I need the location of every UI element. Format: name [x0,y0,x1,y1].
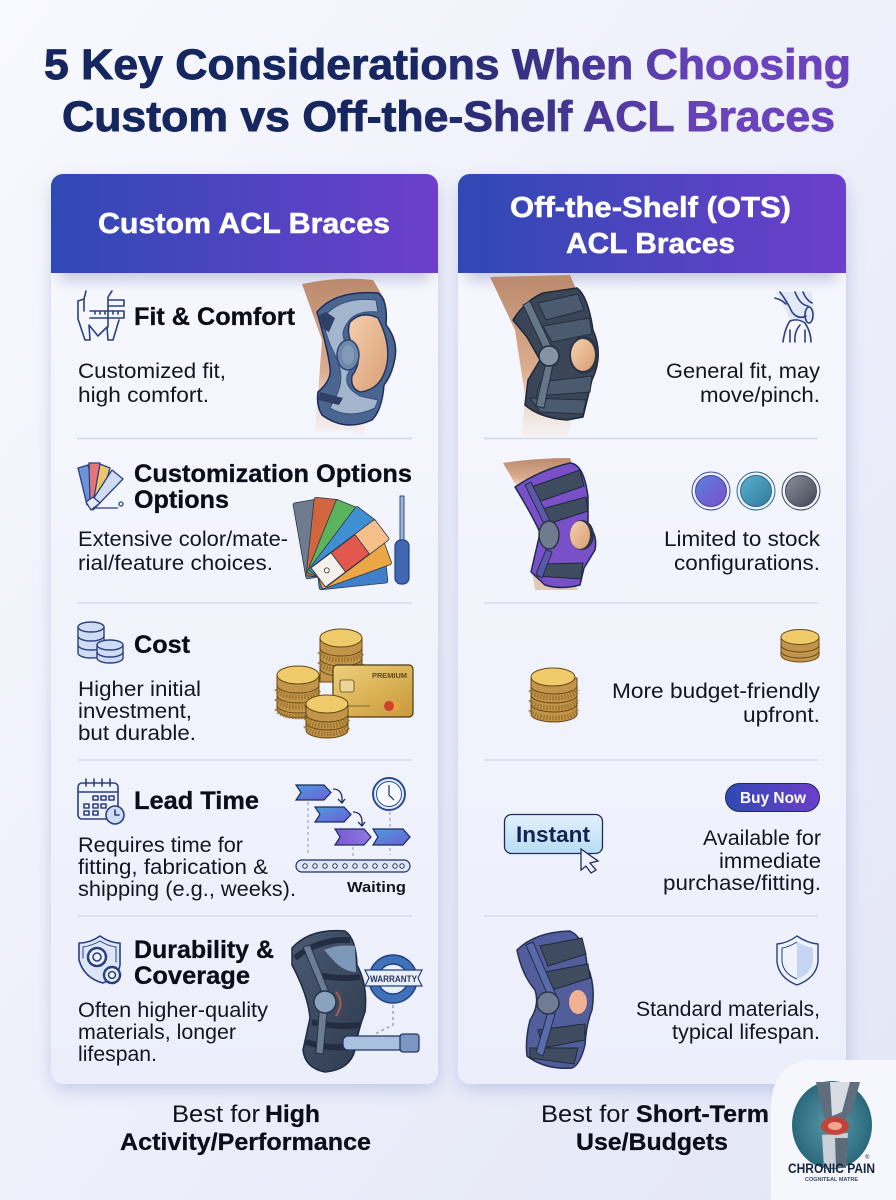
row: durability and coverage [78,931,422,1072]
row: immediate purchase: immediate [719,850,821,873]
row: cost: investment, [78,700,192,723]
row: standard materials [517,931,820,1068]
title: 5 Key Considerations When Choosing [44,41,851,89]
footer: custom recommendation: Activity/Performance [120,1129,371,1156]
row: general fit [490,275,821,436]
illustration: gantt timeline: Waiting [347,879,406,896]
header: custom: Custom ACL Braces [98,208,390,240]
illustration: purple brace [503,458,596,590]
logo: chronic pain [771,1060,896,1200]
row: budget-friendly: More budget-friendly [612,680,821,703]
icon: shield with gears [79,936,120,983]
row: general fit: move/pinch. [700,384,820,407]
illustration: gantt timeline [296,778,410,896]
row: fit and comfort: Customized fit, [78,360,226,383]
row: customization options: Options [134,486,229,514]
logo: chronic pain: ® [865,1154,870,1161]
button: instant: Instant [516,822,591,847]
row: immediate purchase [504,784,821,895]
header: off-the-shelf [458,174,846,273]
row: budget-friendly [531,630,821,727]
logo: chronic pain: COGNITEAL MATRE [805,1177,859,1183]
title: Custom vs Off-the-Shelf ACL Braces [62,93,835,141]
row: cost: Higher initial [78,678,201,701]
icon: shield [777,936,818,985]
row: fit and comfort [78,279,396,434]
row: fit and comfort: Fit & Comfort [134,303,296,331]
footer: off-the-shelf recommendation: Best for [541,1101,629,1128]
header: off-the-shelf: Off-the-Shelf (OTS) [510,192,791,224]
illustration: dark brace with warranty badge: WARRANTY [370,974,417,984]
icon: knee joint [775,292,815,342]
illustration: colour fan and screwdriver [293,496,409,590]
footer: custom recommendation: Best for [172,1101,260,1128]
row: budget-friendly: upfront. [743,704,820,727]
illustration: gold coins and premium card: PREMIUM [372,671,407,680]
row: lead time: Lead Time [134,787,259,815]
row: durability and coverage: Often higher-quality [78,999,269,1022]
footer: off-the-shelf recommendation: Use/Budgets [576,1129,728,1156]
icon: calendar with clock [78,779,124,824]
footer: off-the-shelf recommendation: Short-Term [636,1101,769,1128]
row: durability and coverage: materials, longer [78,1021,236,1044]
row: limited configurations: Limited to stock [664,528,821,551]
footer: off-the-shelf recommendation [541,1101,769,1156]
row: lead time: Requires time for [78,834,243,857]
header: custom [51,174,438,273]
title [44,41,851,141]
icon: coin stacks [78,622,123,663]
button: buy now [726,784,820,812]
row: limited configurations [503,458,821,590]
row: standard materials: typical lifespan. [672,1021,820,1044]
row: lead time: shipping (e.g., weeks). [78,878,296,901]
footer: custom recommendation: High [265,1101,320,1128]
footer: custom recommendation [120,1101,371,1156]
row: standard materials: Standard materials, [636,998,820,1021]
row: general fit: General fit, may [666,360,821,383]
icon: swatch fan [78,463,123,510]
illustration: custom knee brace [302,279,396,434]
row: cost: but durable. [78,722,196,745]
row: durability and coverage: Coverage [134,962,250,990]
illustration: black hinged brace [490,275,599,436]
logo: chronic pain: CHRONIC PAIN [788,1161,875,1176]
button: instant [504,814,602,873]
row: customization options: rial/feature choices. [78,552,273,575]
row: cost: Cost [134,631,191,659]
icon: coin stack left [531,668,577,722]
icon: caliper [78,291,124,340]
panel: custom ACL braces [51,174,438,1088]
row: customization options: Extensive color/mate- [78,528,288,551]
illustration: gold coins and premium card [277,629,413,738]
row: immediate purchase: Available for [703,827,821,850]
row: lead time [78,778,410,901]
row: customization options [78,460,412,590]
button: buy now: Buy Now [740,790,807,807]
row: customization options: Customization Options [134,460,412,488]
row: cost [78,622,413,745]
icon: coin stack right [781,630,819,662]
row: limited configurations: configurations. [674,552,820,575]
illustration: blue brace [517,931,593,1068]
row: fit and comfort: high comfort. [78,384,209,407]
row: durability and coverage: Durability & [134,936,274,964]
panel: off-the-shelf ACL braces [458,174,846,1088]
icon: stock colour dots [692,472,820,510]
illustration: dark brace with warranty badge [292,931,422,1072]
header: off-the-shelf: ACL Braces [566,228,735,260]
row: durability and coverage: lifespan. [78,1043,157,1066]
row: immediate purchase: purchase/fitting. [663,872,821,895]
row: lead time: fitting, fabrication & [78,856,268,879]
